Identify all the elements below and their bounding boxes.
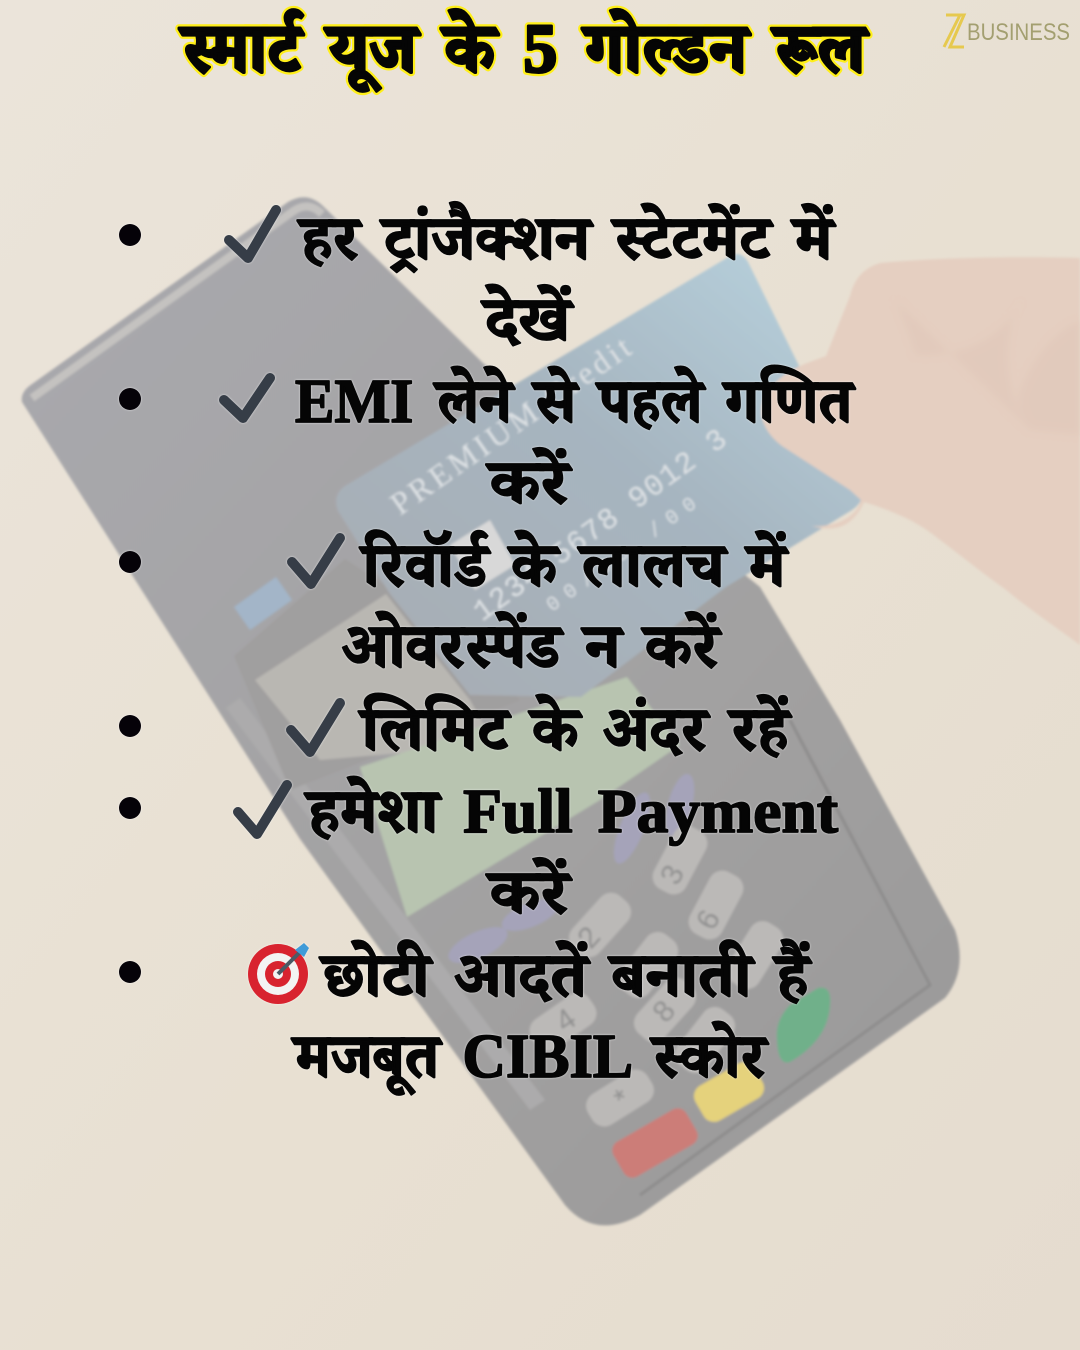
bullet 3: [119, 551, 141, 573]
list: five rules: [119, 201, 856, 1095]
right bezel stripe: [640, 720, 930, 1195]
title: स्मार्ट यूज के 5 गोल्डन रूल: [178, 9, 869, 92]
yellow key: [690, 1058, 768, 1126]
key cluster: 8: [646, 994, 682, 1029]
rule 5: हमेशा Full Payment: [304, 776, 838, 846]
bullet 4: [119, 715, 141, 737]
check 5: [238, 785, 287, 834]
rule 3: रिवॉर्ड के लालच में: [359, 530, 789, 600]
photo: card terminal with hand holding credit card: [22, 197, 1080, 1225]
grey keys: 2: [571, 920, 607, 955]
key cluster: 3: [654, 860, 691, 890]
key cluster: *: [608, 1082, 636, 1117]
rule 1: हर ट्रांजैक्शन स्टेटमेंट में: [297, 201, 836, 273]
terminal top ridge: [32, 206, 322, 398]
rule 4: लिमिट के अंदर रहें: [358, 694, 792, 764]
bullet 6: [119, 961, 141, 983]
card text: premium: PREMIUM Credit: [383, 329, 638, 522]
credit card: [336, 254, 862, 697]
red key: [609, 1105, 701, 1181]
receipt paper: [255, 594, 495, 760]
logo Z mark: [944, 15, 964, 47]
closing line: मजबूत CIBIL स्कोर: [291, 1021, 769, 1095]
bullet 5: [119, 797, 141, 819]
rule 2: [224, 366, 856, 517]
rule 1: देखें: [481, 284, 575, 354]
rule 3: [292, 530, 789, 681]
hand: [761, 257, 1080, 645]
lower bezel stripe: [226, 698, 545, 1110]
blue panel mark: [234, 577, 292, 630]
rule 3: ओवरस्पेंड न करें: [342, 611, 723, 681]
check 2: [224, 378, 270, 418]
key cluster: [444, 771, 830, 1181]
green key: [777, 988, 830, 1063]
card text: number: 1234 5678 9012 3: [468, 423, 735, 630]
icon: target: [248, 943, 309, 1004]
rule 5: [238, 776, 838, 927]
bullet 1: [119, 224, 141, 246]
rule 2: करें: [486, 447, 573, 517]
bullet 2: [119, 388, 141, 410]
rule 2: EMI लेने से पहले गणित: [295, 366, 856, 436]
logo: Z Business: [944, 15, 1070, 47]
card chip: [450, 520, 515, 590]
terminal body: [22, 197, 960, 1225]
receipt slot: [234, 559, 520, 790]
key cluster: 4: [550, 1002, 582, 1039]
check 4: [291, 703, 340, 752]
check 3: [292, 538, 340, 584]
grey keys: [563, 887, 637, 963]
purple keys: [607, 788, 657, 868]
key cluster: 6: [690, 905, 727, 935]
rule 5: करें: [486, 857, 573, 927]
closing line: [248, 939, 812, 1095]
hand shading: [895, 300, 1080, 435]
closing line: छोटी आदतें बनाती हैं: [319, 939, 812, 1010]
check 1: [229, 210, 276, 258]
terminal screen: [360, 677, 680, 917]
title: स्मार्ट यूज के 5 गोल्डन रूल: [178, 9, 869, 92]
card text: expiry: 00/00 /00: [543, 493, 702, 618]
rule 1: [229, 201, 836, 354]
